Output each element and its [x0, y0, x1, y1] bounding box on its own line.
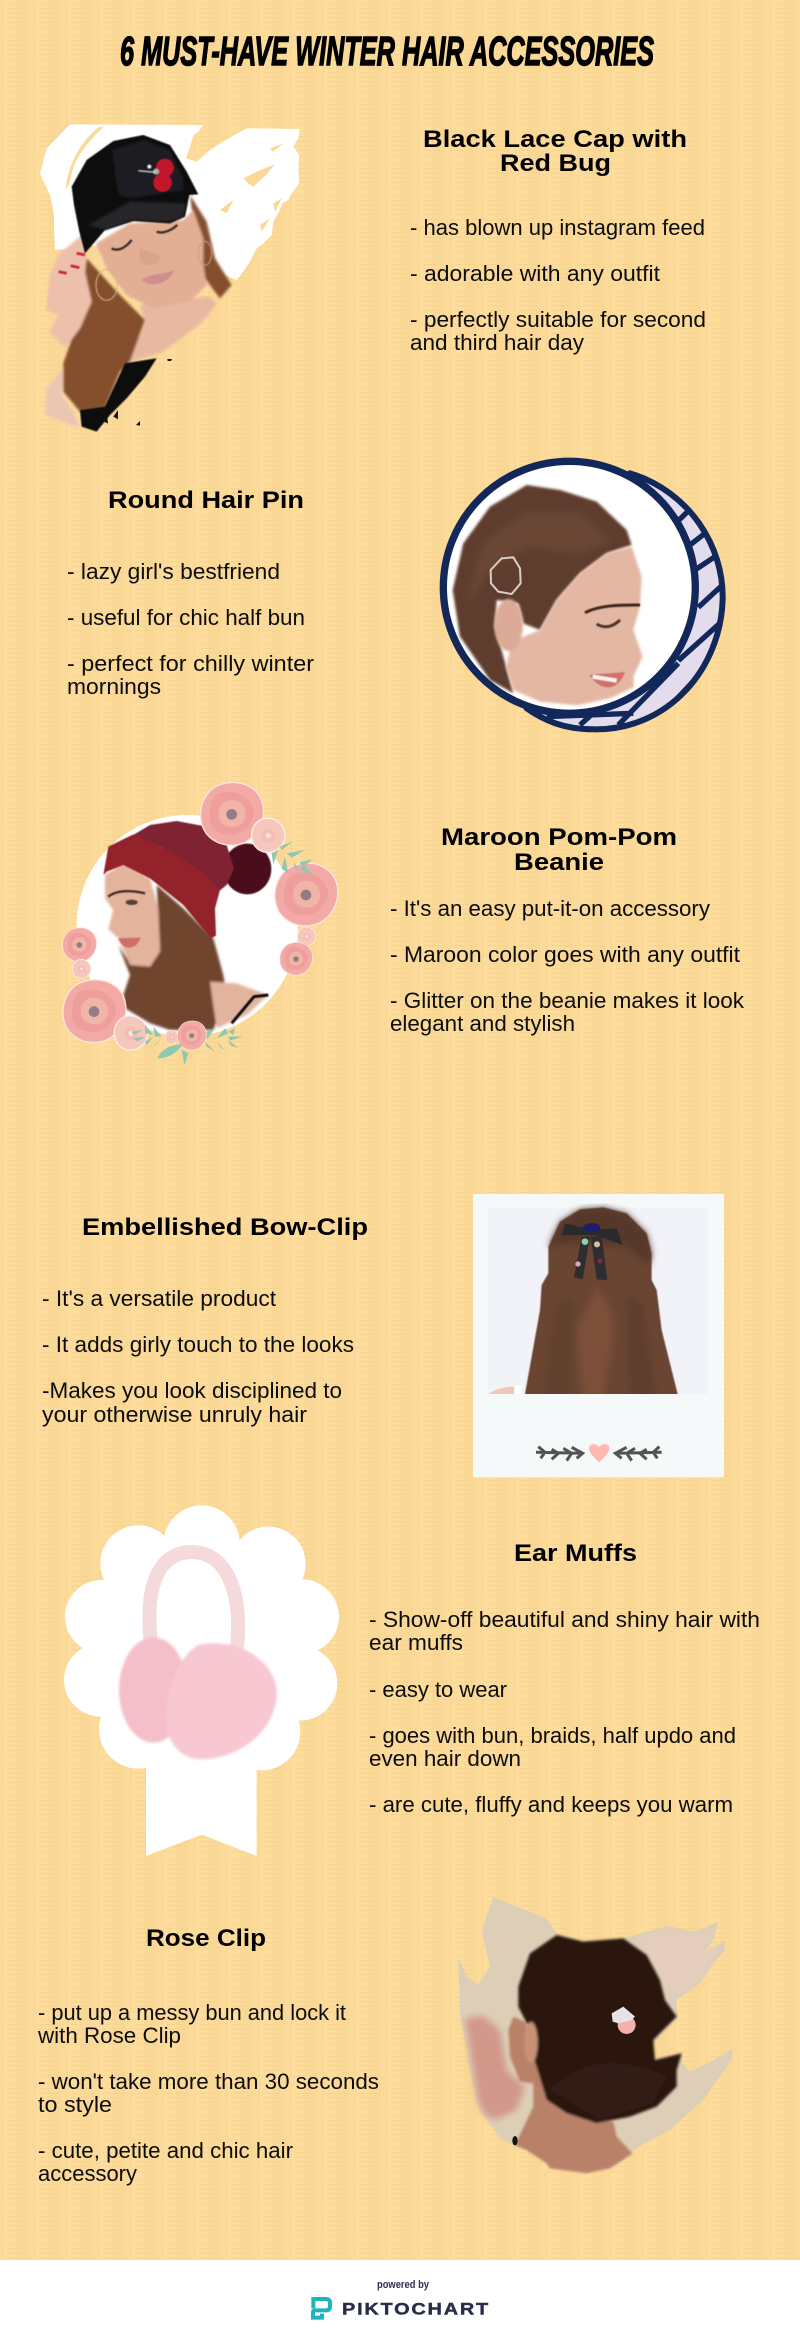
neck and chest — [127, 297, 217, 363]
red bug ornament — [156, 159, 174, 177]
heading: Embellished Bow-Clip — [82, 1214, 368, 1241]
pom-pom — [223, 844, 271, 894]
ear — [494, 599, 523, 651]
hatched crescent — [527, 473, 723, 729]
bullet list: your otherwise unruly hair — [42, 1402, 308, 1427]
rosette badge with ear muffs — [64, 1505, 339, 1856]
left muff — [119, 1637, 188, 1743]
text: embellished bow-clip — [42, 1214, 368, 1427]
bullet list: mornings — [67, 674, 161, 699]
bullet list: - It adds girly touch to the looks — [42, 1332, 354, 1357]
heading: Maroon Pom-Pom — [441, 824, 677, 851]
laurels — [536, 1447, 662, 1461]
blurred pink flowers, left — [465, 2016, 525, 2120]
piktochart wordmark: PIKTOCHART — [342, 2300, 490, 2318]
heading: Round Hair Pin — [108, 487, 304, 514]
bullet list: - put up a messy bun and lock it — [38, 2000, 347, 2025]
bullet list: elegant and stylish — [390, 1011, 575, 1036]
heading — [423, 126, 687, 177]
eyebrow, eye, lips — [585, 605, 640, 613]
bullet list: even hair down — [369, 1746, 521, 1771]
face — [96, 210, 207, 308]
neck — [508, 2017, 632, 2173]
photo: woman in black lace cap with red bug — [40, 124, 300, 432]
bullet list: -Makes you look disciplined to — [42, 1378, 342, 1403]
white circle — [77, 815, 298, 1036]
bow — [562, 1223, 623, 1280]
hair and bun — [518, 1935, 682, 2123]
bullet list: with Rose Clip — [37, 2023, 181, 2048]
bullet list — [67, 559, 315, 699]
text: rose clip — [37, 1925, 379, 2186]
cap — [72, 135, 198, 253]
right muff — [167, 1643, 277, 1759]
heading — [441, 824, 677, 876]
leaves — [132, 841, 313, 1065]
bullet list — [42, 1286, 354, 1427]
ear — [524, 2022, 538, 2063]
text: round hair pin — [67, 487, 315, 699]
bullet list: - perfectly suitable for second — [410, 307, 706, 332]
bullet list: - perfect for chilly winter — [67, 651, 315, 676]
heading: Rose Clip — [146, 1925, 266, 1952]
shoulder — [488, 1387, 514, 1394]
heading: Ear Muffs — [514, 1540, 637, 1567]
card — [473, 1194, 724, 1477]
footer band — [0, 2260, 800, 2341]
bullet list: - cute, petite and chic hair — [38, 2138, 294, 2163]
bullet list — [390, 896, 745, 1036]
bullet list: - adorable with any outfit — [410, 261, 661, 286]
heading: Red Bug — [500, 150, 611, 177]
bullet list: - useful for chic half bun — [67, 605, 305, 630]
left faded skin arm — [45, 368, 80, 428]
blurred pink background, top right — [637, 1932, 717, 1995]
rose clip — [612, 2007, 636, 2034]
bullet list: to style — [38, 2092, 112, 2117]
heading: Black Lace Cap with — [423, 126, 687, 153]
face — [105, 863, 160, 967]
bullet list: and third hair day — [410, 330, 585, 355]
hand — [46, 235, 92, 348]
bullet list: - easy to wear — [369, 1677, 507, 1702]
photo: maroon beanie in floral wreath — [63, 782, 338, 1065]
hair — [523, 1207, 680, 1403]
beanie crown — [133, 821, 234, 892]
black top — [80, 358, 157, 432]
heading: Beanie — [514, 849, 604, 876]
photo background — [488, 1207, 708, 1394]
bullet list: - goes with bun, braids, half updo and — [369, 1723, 736, 1748]
bullet list: ear muffs — [369, 1630, 463, 1655]
face — [506, 547, 643, 705]
text: maroon pom-pom beanie — [390, 824, 745, 1036]
bullet list: - lazy girl's bestfriend — [67, 559, 280, 584]
bullet list: - It's an easy put-it-on accessory — [390, 896, 711, 921]
bullet list — [369, 1607, 760, 1817]
bullet list: accessory — [38, 2161, 138, 2186]
text: black lace cap — [410, 126, 706, 355]
white scalloped rosette and ribbon — [64, 1505, 339, 1856]
bullet list: - Show-off beautiful and shiny hair with — [369, 1607, 760, 1632]
photo: round hair pin in hatched circle — [443, 461, 723, 729]
bullet list: - Maroon color goes with any outfit — [390, 942, 741, 967]
hair — [453, 485, 632, 693]
bullet list: - are cute, fluffy and keeps you warm — [369, 1792, 733, 1817]
hatch lines — [547, 510, 722, 725]
powered by text: powered by — [377, 2279, 430, 2291]
bullet list — [410, 215, 706, 355]
hair — [118, 885, 227, 1030]
black flecks — [104, 359, 172, 426]
text: ear muffs — [369, 1540, 760, 1817]
photo: rose clip in messy bun, brush mask — [458, 1897, 733, 2173]
beanie cuff — [103, 834, 220, 938]
bullet list — [37, 2000, 379, 2186]
bullet list: - Glitter on the beanie makes it look — [390, 988, 745, 1013]
hair — [63, 195, 232, 412]
navy ring — [443, 461, 695, 713]
bullet list: - has blown up instagram feed — [410, 215, 705, 240]
heart — [589, 1444, 609, 1462]
piktochart logo icon — [313, 2299, 330, 2318]
eyes, mouth and nails — [112, 240, 132, 250]
flowers — [63, 782, 338, 1050]
strap — [232, 995, 268, 1023]
bullet list: - It's a versatile product — [42, 1286, 277, 1311]
white brush stroke background — [40, 124, 300, 280]
necklace bead — [512, 2136, 518, 2145]
hair pin — [491, 557, 521, 594]
head band — [149, 1552, 238, 1650]
photo card: bow clip on long hair — [473, 1194, 724, 1477]
bullet list: - won't take more than 30 seconds — [38, 2069, 379, 2094]
beige brush shape — [458, 1897, 733, 2173]
neck and shoulder — [210, 982, 268, 1028]
